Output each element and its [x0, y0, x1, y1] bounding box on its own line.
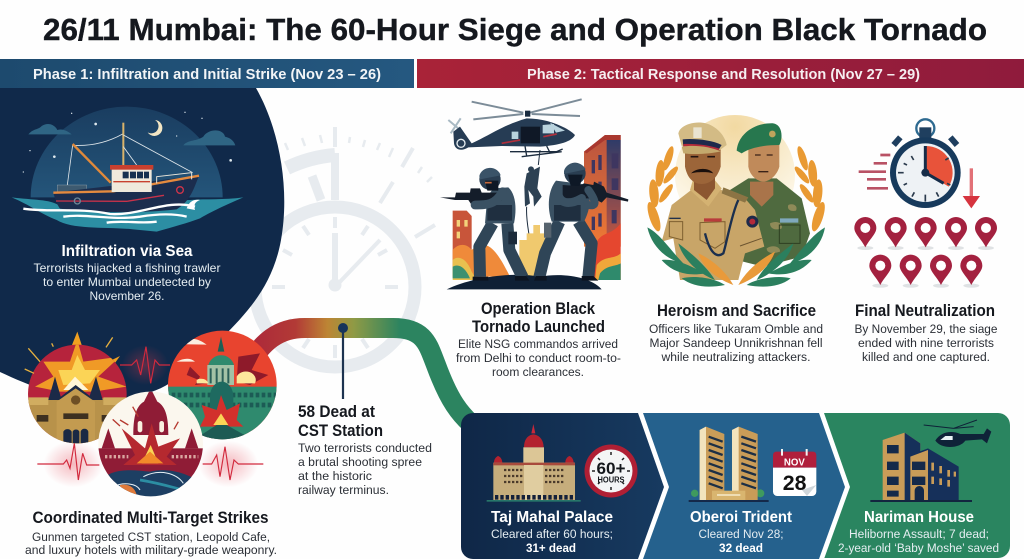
text: Taj Mahal Palace: Taj Mahal Palace [491, 509, 613, 526]
icon: 60+ hours clock: 60+ [596, 459, 626, 478]
icon: officers with laurel [645, 115, 828, 287]
text: 58 dead at CST station: CST Station [298, 421, 383, 440]
text: final neutralization: ended with nine terrorists [858, 336, 994, 350]
text: 58 dead at CST station [298, 402, 432, 497]
text: Nariman House: Heliborne Assault; 7 dead; [849, 527, 989, 541]
text: operation black tornado: Tornado Launched [472, 318, 605, 336]
panel: phase 2 header [417, 59, 1024, 88]
icon: calendar Nov 28: NOV [784, 458, 805, 469]
panel: Oberoi Trident [620, 413, 845, 559]
icon: stopwatch and pins [854, 119, 997, 288]
text: infiltration via sea: November 26. [90, 289, 164, 303]
icon: 60+ hours clock: HOURS [598, 476, 625, 484]
text: Oberoi Trident: 32 dead [719, 541, 763, 555]
text: final neutralization: killed and one captured. [862, 350, 990, 364]
text: Nariman House: Nariman House [864, 509, 974, 526]
figure: right commando [534, 163, 628, 281]
text: coordinated strikes [25, 509, 277, 557]
figure: left commando [440, 168, 529, 281]
icon: Taj hotel building [487, 424, 581, 502]
panel: infiltration via sea [0, 88, 284, 400]
text: Taj Mahal Palace: 31+ dead [526, 541, 576, 555]
figure: army officer [730, 123, 810, 267]
icon: explosion at CST station [25, 332, 130, 447]
figure: police officer [662, 122, 764, 280]
icon: fishing trawler [12, 107, 243, 232]
text: operation black tornado [456, 300, 621, 379]
text: coordinated strikes: and luxury hotels with military-grade weaponry. [25, 543, 277, 557]
text: 58 dead at CST station: a brutal shooting spree [298, 455, 422, 469]
text: infiltration via sea: to enter Mumbai undetected by [43, 275, 211, 289]
text: 58 dead at CST station: Two terrorists conducted [298, 441, 432, 455]
text: heroism and sacrifice: Major Sandeep Unnikrishnan fell [650, 336, 822, 350]
icon: calendar Nov 28: 28 [783, 471, 807, 495]
text: operation black tornado: from Delhi to conduct room-to- [456, 351, 621, 365]
text: Nariman House [838, 509, 999, 555]
text: Taj Mahal Palace [491, 509, 613, 555]
icon: explosion at hotel with water [98, 388, 205, 500]
text: final neutralization: Final Neutralization [855, 302, 995, 320]
icon: 60+ hours clock [584, 444, 638, 498]
timeline marker: CST station [338, 323, 348, 399]
text: 58 dead at CST station: 58 Dead at [298, 402, 375, 421]
icon: calendar Nov 28 [773, 449, 816, 496]
panel: coordinated strikes illustration [25, 329, 278, 500]
panel: Nariman House [800, 413, 1010, 559]
text: heroism and sacrifice: Officers like Tukaram Omble and [649, 322, 823, 336]
text: coordinated strikes: Gunmen targeted CST station, Leopold Cafe, [32, 530, 270, 544]
text: Oberoi Trident [690, 509, 793, 555]
text: heroism and sacrifice [649, 302, 823, 364]
text: Oberoi Trident: Oberoi Trident [690, 509, 793, 526]
text: infiltration via sea: Infiltration via Sea [62, 243, 193, 260]
text: Nariman House: 2-year-old ‘Baby Moshe’ saved [838, 541, 999, 555]
icon: green laurel [647, 227, 825, 287]
text: infiltration via sea [34, 243, 221, 303]
text: heroism and sacrifice: Heroism and Sacrifice [657, 302, 816, 320]
text: 58 dead at CST station: at the historic [298, 469, 372, 483]
panel: phase 1 header [0, 59, 414, 88]
text: Taj Mahal Palace: Cleared after 60 hours; [491, 527, 613, 541]
icon: explosion at Taj hotel [167, 329, 278, 442]
text: infiltration via sea: Terrorists hijacked a fishing trawler [34, 261, 221, 275]
icon: Nariman House building and helicopter [870, 420, 991, 502]
text: 58 dead at CST station: railway terminus. [298, 483, 389, 497]
text: operation black tornado: Elite NSG commandos arrived [458, 337, 618, 351]
timeline road [248, 328, 490, 437]
panel: phase 1 header: Phase 1: Infiltration and Initial Strike (Nov 23 – 26) [33, 67, 381, 83]
icon: pulse lines [37, 347, 263, 480]
text: operation black tornado: Operation Black [481, 300, 596, 318]
text: final neutralization [854, 302, 998, 364]
text: final neutralization: By November 29, the siage [854, 322, 998, 336]
icon: commandos and helicopter [440, 99, 628, 289]
text: Oberoi Trident: Cleared Nov 28; [698, 527, 784, 541]
text: coordinated strikes: Coordinated Multi-Target Strikes [32, 509, 268, 527]
text: heroism and sacrifice: while neutralizing attackers. [661, 350, 810, 364]
clock watermark [255, 127, 435, 367]
title: 26/11 Mumbai: The 60-Hour Siege and Operation Black Tornado [43, 12, 987, 47]
panel: phase 2 header: Phase 2: Tactical Response and Resolution (Nov 27 – 29) [527, 67, 920, 83]
panel: Taj Mahal Palace [461, 413, 664, 559]
text: operation black tornado: room clearances. [492, 365, 584, 379]
icon: Oberoi towers [689, 427, 769, 502]
